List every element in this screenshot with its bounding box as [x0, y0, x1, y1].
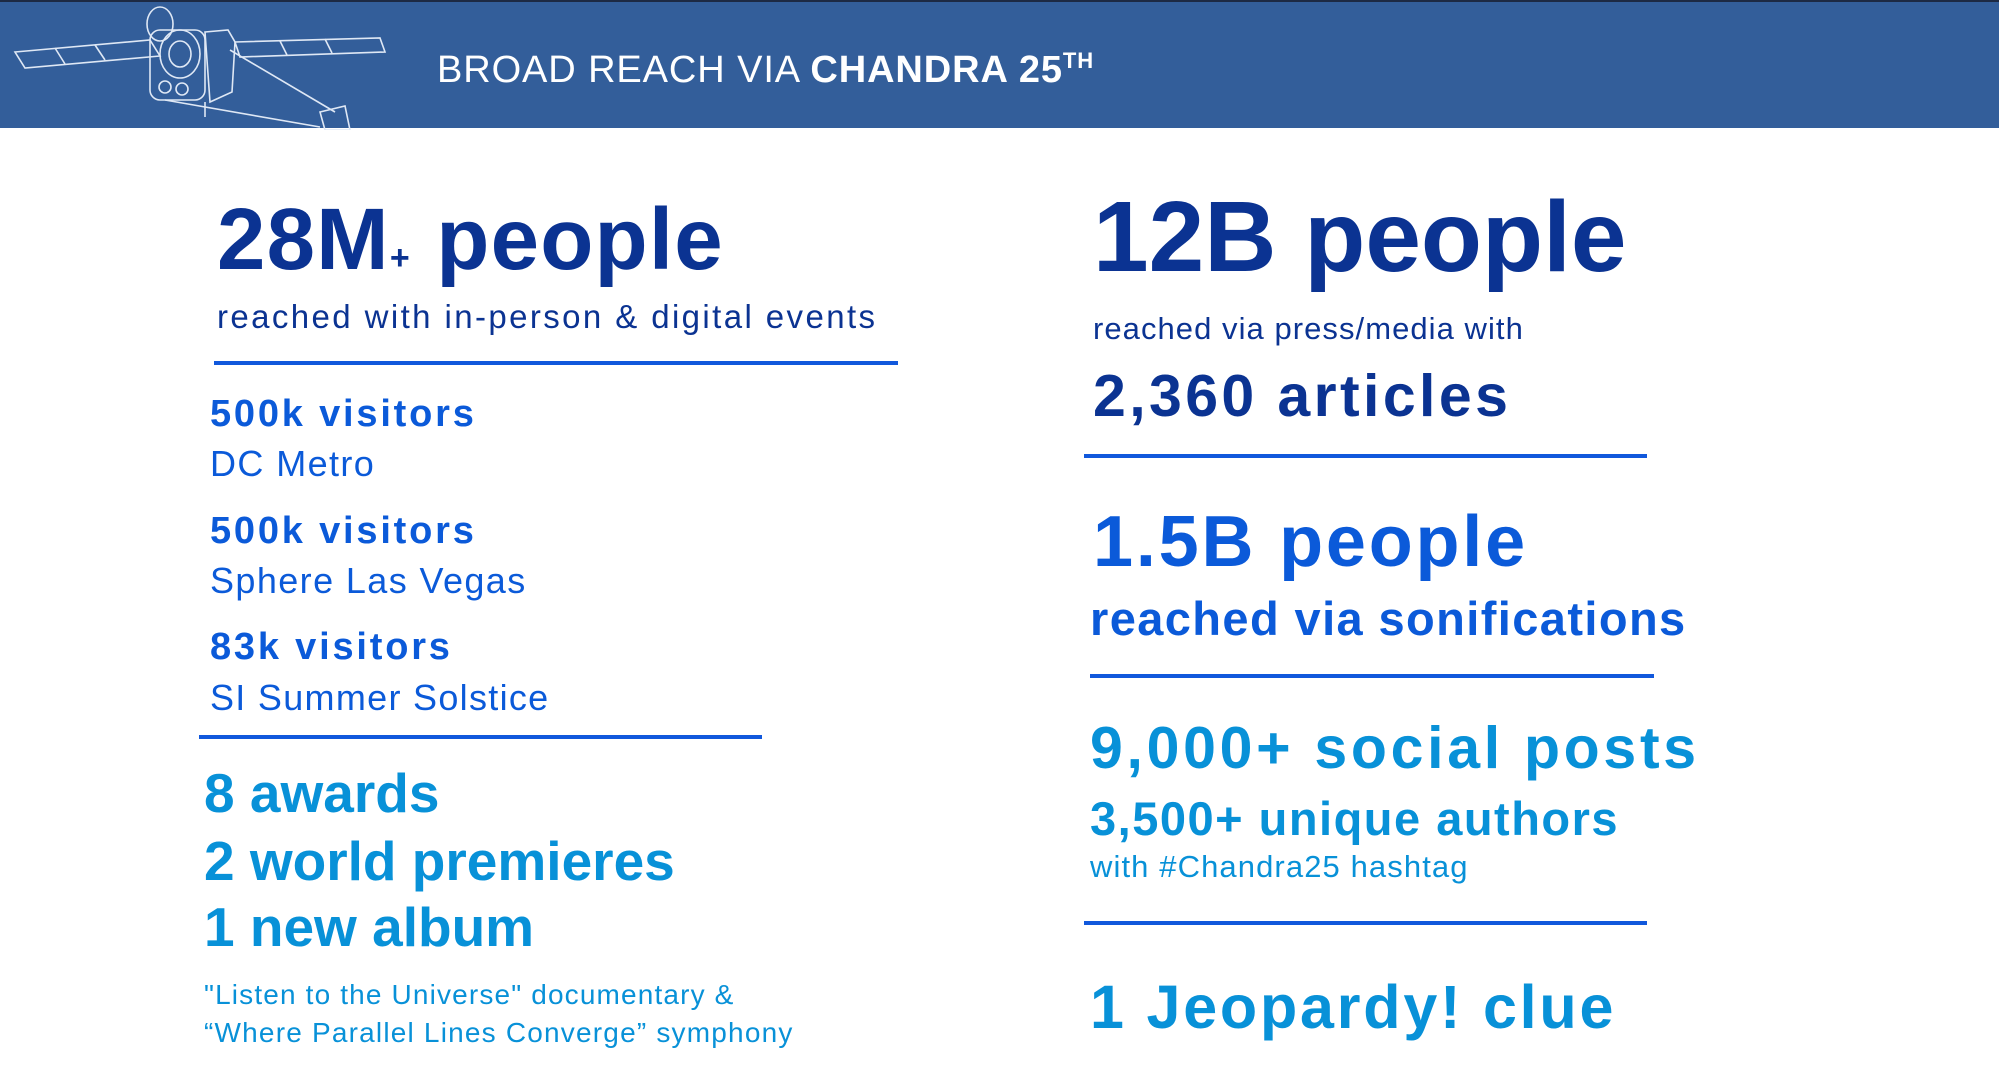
header banner: [0, 0, 1999, 128]
panel: in-person & digital events: DC Metro: [210, 443, 375, 484]
note: "Listen to the Universe" documentary &: [204, 979, 734, 1010]
awards list: 8 awards: [204, 762, 439, 824]
headline: 28M+ people: 28M+ people: [217, 191, 724, 288]
panel: press, sonifications, social: with #Chandra25 hashtag: [1090, 849, 1469, 884]
panel: in-person & digital events: 1 new album: [204, 896, 534, 958]
subtitle: reached with in-person & digital events: [217, 298, 877, 335]
title: BROAD REACH VIA CHANDRA 25TH: [437, 48, 1094, 91]
panel: in-person & digital events: [199, 191, 898, 1048]
panel: in-person & digital events: 2 world premieres: [204, 830, 675, 892]
stat: Sphere Las Vegas: 500k visitors: [210, 510, 477, 552]
stat: Jeopardy: 1 Jeopardy! clue: [1090, 973, 1616, 1041]
panel: press, sonifications, social: 3,500+ unique authors: [1090, 792, 1619, 845]
panel: press, sonifications, social: reached via sonifications: [1090, 592, 1687, 645]
panel: in-person & digital events: “Where Parallel Lines Converge” symphony: [204, 1017, 794, 1048]
icon: Chandra satellite line drawing: [14, 6, 386, 130]
stat: social posts: 9,000+ social posts: [1090, 715, 1700, 781]
stat: SI Summer Solstice: 83k visitors: [210, 626, 453, 668]
stat: DC Metro: 500k visitors: [210, 393, 477, 435]
text: press/media: reached via press/media with: [1093, 311, 1524, 346]
panel: press, sonifications, social: [1084, 181, 1700, 1041]
panel: in-person & digital events: Sphere Las Vegas: [210, 560, 527, 601]
panel: press, sonifications, social: 2,360 articles: [1093, 363, 1511, 429]
stat: sonifications: 1.5B people: [1093, 502, 1528, 582]
headline: 12B people: 12B people: [1093, 181, 1626, 293]
panel: in-person & digital events: SI Summer Solstice: [210, 677, 550, 718]
